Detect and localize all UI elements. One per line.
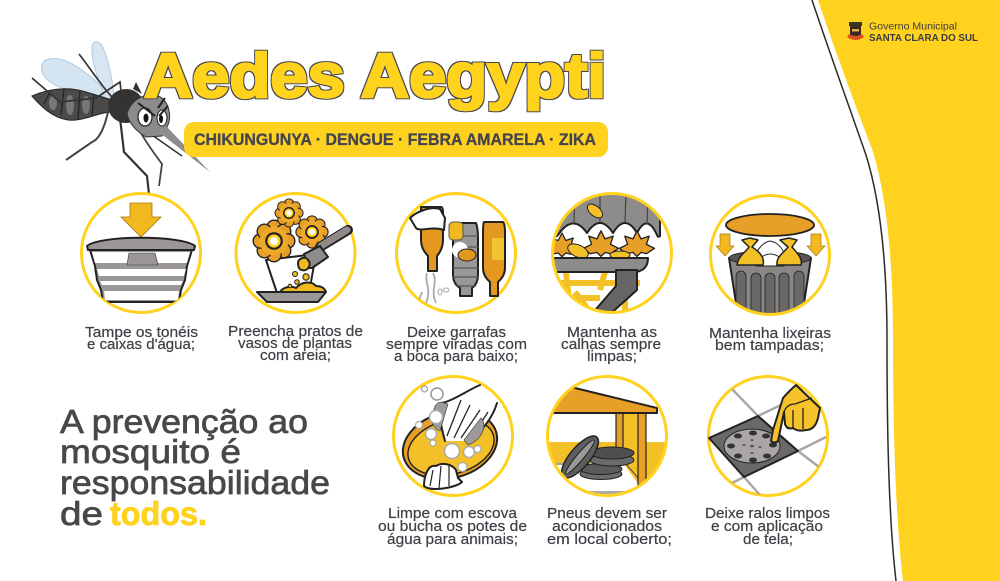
title: Aedes Aegypti xyxy=(144,42,606,111)
label xyxy=(709,326,831,354)
black curve line xyxy=(812,0,896,581)
label: Mantenha as xyxy=(567,325,657,341)
government logo: SANTA CLARA DO SUL xyxy=(869,32,979,44)
label: Limpe com escova xyxy=(388,506,518,522)
label: Preencha pratos de xyxy=(228,324,363,340)
label: limpas; xyxy=(587,349,637,365)
panel: tampe tonéis xyxy=(82,194,200,353)
icon: tires under shelter xyxy=(545,375,670,500)
label xyxy=(228,324,363,364)
heading: prevenção: todos. xyxy=(110,495,207,532)
yellow curved side panel xyxy=(818,0,1000,581)
icon: flower pot xyxy=(236,194,355,312)
label xyxy=(561,325,661,365)
label xyxy=(705,506,830,548)
icon: washing bowl xyxy=(394,376,512,496)
label xyxy=(85,325,198,353)
heading: prevenção: mosquito é xyxy=(60,433,241,470)
panel: pratos de plantas xyxy=(228,194,363,364)
label: Deixe garrafas xyxy=(407,325,506,341)
panel: garrafas xyxy=(386,194,527,365)
heading: prevenção xyxy=(60,403,330,532)
label: com areia; xyxy=(260,348,331,364)
logo text: Governo Municipal xyxy=(869,20,957,32)
label: e caixas d'água; xyxy=(87,337,195,353)
label xyxy=(547,506,672,548)
label xyxy=(386,325,527,365)
icon: roof gutter with leaves xyxy=(546,190,675,316)
label: calhas sempre xyxy=(561,337,661,353)
label: e com aplicação xyxy=(711,519,823,535)
label: bem tampadas; xyxy=(715,338,824,354)
icon: mosquito xyxy=(32,42,210,194)
icon: bottles upside down xyxy=(396,194,516,312)
label: ou bucha os potes de xyxy=(378,519,527,535)
diseases list: CHIKUNGUNYA · DENGUE · FEBRA AMARELA · ZIKA xyxy=(194,131,596,149)
icon: water tank with arrow xyxy=(82,194,200,312)
label: vasos de plantas xyxy=(238,336,352,352)
panel: potes de água xyxy=(378,376,527,548)
logo crest xyxy=(847,22,864,40)
label: de tela; xyxy=(743,532,793,548)
government logo xyxy=(847,20,979,44)
label: Deixe ralos limpos xyxy=(705,506,830,522)
heading: prevenção: responsabilidade xyxy=(60,464,330,501)
panel: lixeiras xyxy=(709,196,831,354)
label: água para animais; xyxy=(387,532,518,548)
subtitle pill xyxy=(184,122,608,157)
panel: pneus xyxy=(545,375,672,548)
icon: trash can xyxy=(710,196,830,319)
label: em local coberto; xyxy=(547,532,672,548)
heading: prevenção: de xyxy=(60,495,103,532)
heading: prevenção: A prevenção ao xyxy=(60,403,308,440)
icon: floor drain with finger xyxy=(708,376,828,496)
panel: calhas xyxy=(546,190,675,365)
label: a boca para baixo; xyxy=(394,349,518,365)
label: sempre viradas com xyxy=(386,337,527,353)
label xyxy=(378,506,527,548)
label: acondicionados xyxy=(552,519,662,535)
label: Tampe os tonéis xyxy=(85,325,198,341)
panel: ralos xyxy=(705,376,830,548)
label: Pneus devem ser xyxy=(547,506,667,522)
label: Mantenha lixeiras xyxy=(709,326,831,342)
